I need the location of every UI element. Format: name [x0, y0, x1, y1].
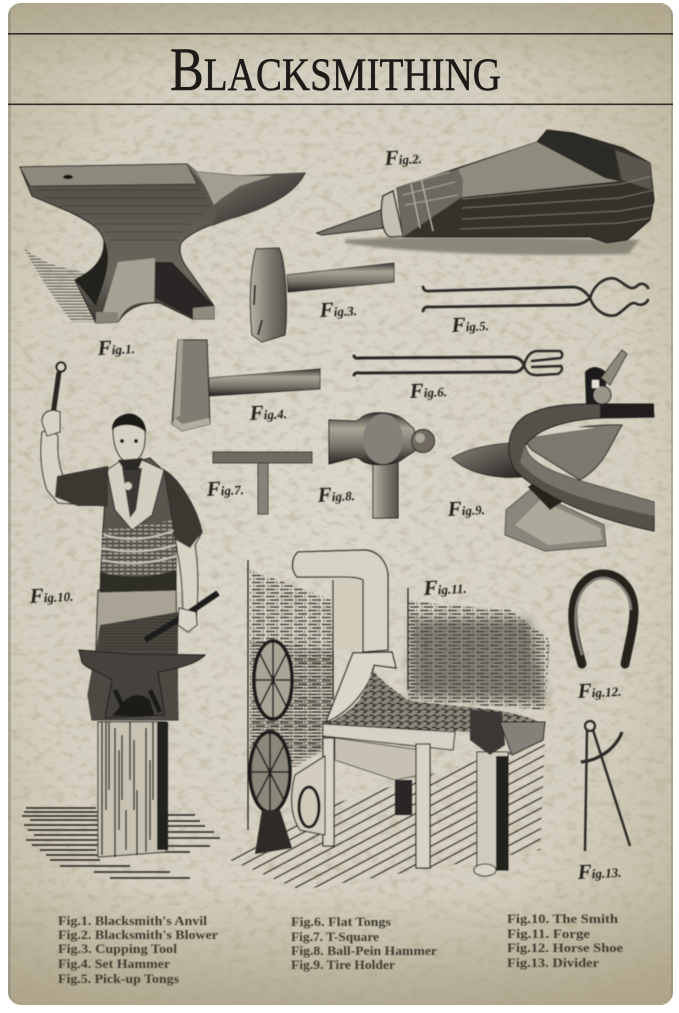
table and legs: [323, 724, 455, 750]
icon: fig 5 pick-up tongs: [423, 278, 648, 316]
label: Fig.7: Fig.7.: [205, 475, 244, 501]
raised arm: [41, 430, 108, 506]
legend column 3: Fig.11. Forge: [507, 927, 591, 941]
icon: fig 11 forge: [230, 550, 550, 890]
legend column 2: Fig.7. T-Square: [291, 930, 379, 944]
icon: fig 1 blacksmith's anvil: [20, 164, 305, 323]
title: BLACKSMITHING: [170, 37, 501, 104]
legend column 2: Fig.8. Ball-Pein Hammer: [291, 944, 437, 958]
stump: [98, 722, 166, 857]
legend column 3: [507, 912, 624, 970]
vest and torso: [100, 458, 176, 592]
flue pipe: [293, 550, 388, 652]
label: Fig.8: Fig.8.: [316, 481, 355, 507]
legend column 1: Fig.4. Set Hammer: [58, 957, 170, 971]
right arm: [164, 470, 202, 620]
wheels and blower: [254, 641, 292, 719]
vise and bench: [477, 752, 508, 870]
legend column 3: Fig.10. The Smith: [507, 912, 618, 926]
hood and coals: [326, 652, 396, 722]
icon: fig 9 tire holder: [452, 350, 654, 551]
label: Fig.13: Fig.13.: [576, 858, 622, 884]
work anvil: [79, 650, 205, 718]
work hammer: [145, 593, 218, 640]
label: Fig.4: Fig.4.: [248, 399, 287, 425]
legend column 2: Fig.9. Tire Holder: [291, 958, 395, 972]
label: Fig.12: Fig.12.: [576, 677, 622, 703]
icon: fig 8 ball-pein hammer: [329, 413, 434, 518]
title band rules: [8, 33, 673, 105]
icon: fig 13 divider: [581, 721, 630, 851]
icon: fig 4 set hammer: [172, 340, 320, 431]
head: [113, 414, 145, 462]
label: Fig.11: Fig.11.: [422, 574, 467, 600]
icon: fig 2 blacksmith's blower: [317, 130, 654, 255]
legend column 1: [58, 914, 218, 986]
icon: fig 3 cupping tool: [250, 248, 394, 342]
label: Fig.5: Fig.5.: [450, 311, 489, 337]
label: Fig.1: Fig.1.: [96, 334, 135, 360]
hammer: [53, 372, 59, 415]
legend column 1: Fig.3. Cupping Tool: [58, 942, 178, 956]
icon: fig 12 horse shoe: [573, 574, 634, 664]
legend column 1: Fig.2. Blacksmith's Blower: [58, 928, 218, 942]
icon: fig 10 the smith: [22, 362, 220, 878]
icon: fig 6 flat tongs: [354, 351, 562, 375]
legend column 1: Fig.5. Pick-up Tongs: [58, 972, 179, 986]
label: Fig.2: Fig.2.: [383, 144, 422, 170]
label: Fig.10: Fig.10.: [28, 582, 74, 608]
legend column 3: Fig.13. Divider: [507, 956, 600, 970]
label: Fig.9: Fig.9.: [446, 495, 485, 521]
label: Fig.3: Fig.3.: [318, 296, 357, 322]
apron: [88, 590, 178, 720]
icon: fig 7 t-square: [213, 452, 312, 514]
legend column 1: Fig.1. Blacksmith's Anvil: [58, 914, 208, 928]
legend column 3: Fig.12. Horse Shoe: [507, 941, 624, 955]
label: Fig.6: Fig.6.: [408, 377, 447, 403]
ground hatching: [22, 808, 220, 878]
legend column 2: Fig.6. Flat Tongs: [291, 915, 391, 929]
legend column 2: [291, 915, 437, 972]
